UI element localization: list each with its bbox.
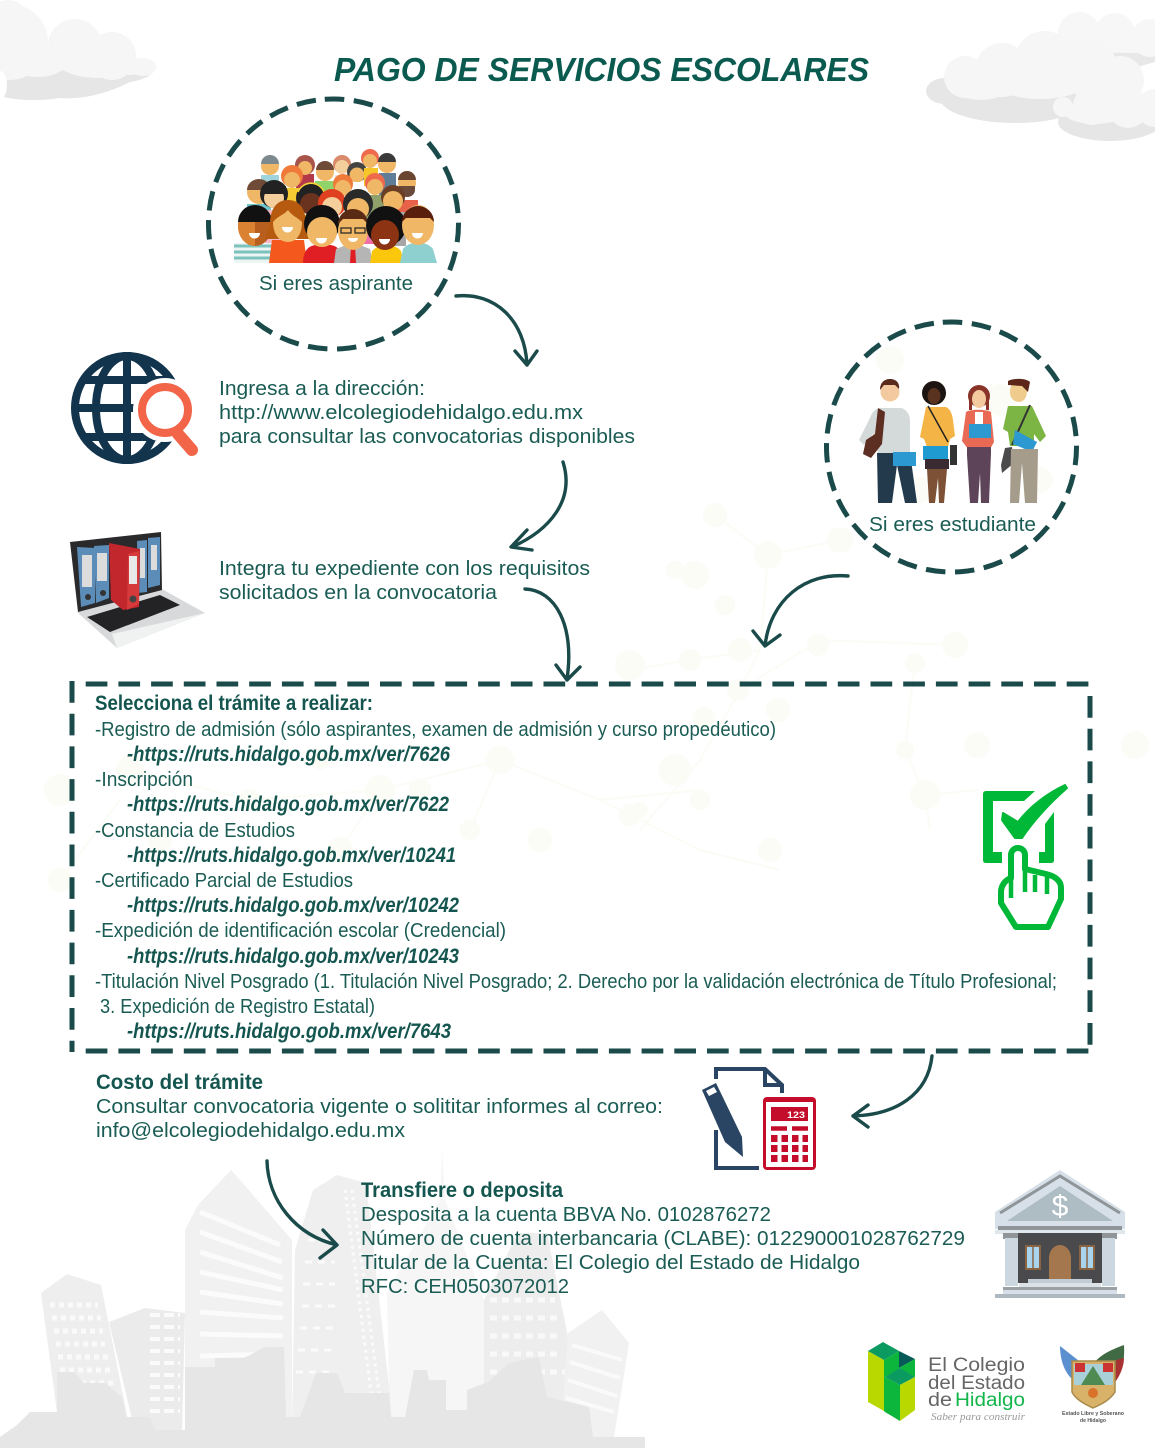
icon: crowd of people: [234, 149, 437, 263]
logo: escudo de Hidalgo: [1060, 1345, 1125, 1424]
list of trámites: -Inscripción: [95, 768, 193, 791]
escudo caption: Estado Libre y Soberano: [1062, 1411, 1125, 1417]
student 2: [920, 381, 957, 503]
logo wordmark: Hidalgo: [955, 1390, 1025, 1411]
text: transfiere o deposita: [361, 1179, 965, 1298]
calculator: 123: [787, 1110, 805, 1120]
text: transfiere o deposita: Transfiere o deposita: [361, 1179, 563, 1202]
logo mark: [868, 1342, 915, 1421]
pencil: [702, 1083, 743, 1157]
middle row: [247, 179, 406, 246]
checkbox frame: [983, 791, 1054, 863]
roof: [995, 1170, 1125, 1222]
icon: globe with magnifier: [75, 352, 197, 464]
right tower: [484, 1233, 580, 1420]
columns: [1003, 1233, 1117, 1286]
flags: [1060, 1346, 1088, 1382]
list of trámites: -Constancia de Estudios: [95, 819, 295, 842]
cloud: top left: [0, 0, 156, 100]
arrow: costo to transfiere: [267, 1161, 337, 1258]
arrow: expediente to trámite: [525, 589, 580, 680]
list of trámites: -Titulación Nivel Posgrado (1. Titulación Nivel Posgrado; 2. Derecho por la validación electrónica de Título Profesional;: [95, 970, 1057, 993]
door: [1049, 1245, 1071, 1279]
person 4: [334, 209, 373, 263]
list of trámites: -Expedición de identificación escolar (Credencial): [95, 919, 506, 942]
logo wordmark: Saber para construir: [931, 1412, 1025, 1423]
escudo caption: [1062, 1411, 1125, 1424]
cloud: top right: [926, 12, 1155, 141]
dollar sign: $: [1052, 1190, 1069, 1223]
text: transfiere o deposita: Número de cuenta interbancaria (CLABE): 012290001028762729: [361, 1227, 965, 1250]
text: ingresa a la dirección: Ingresa a la dirección:: [219, 377, 425, 400]
estudiante circle: [818, 314, 1085, 580]
text: transfiere o deposita: Desposita a la cuenta BBVA No. 0102876272: [361, 1203, 771, 1226]
screen: [70, 532, 162, 612]
icon: four students: [859, 379, 1046, 503]
list of trámites: -https://ruts.hidalgo.gob.mx/ver/10242: [127, 894, 459, 917]
globe: [75, 352, 179, 464]
logo wordmark: de: [928, 1390, 952, 1411]
person 6: [400, 205, 437, 263]
student 1: [859, 379, 917, 503]
foreground silhouette: [0, 1347, 645, 1448]
escudo caption: de Hidalgo: [1080, 1418, 1107, 1424]
text: costo del trámite: [96, 1071, 663, 1142]
person 3: [303, 205, 342, 263]
list of trámites: -https://ruts.hidalgo.gob.mx/ver/10241: [127, 844, 456, 867]
back cloud: [1058, 12, 1155, 72]
text: costo del trámite: Costo del trámite: [96, 1071, 263, 1094]
central pale spire: [387, 1150, 495, 1430]
text: integra tu expediente: solicitados en la convocatoria: [219, 581, 498, 604]
dashed ring: [200, 91, 467, 357]
student 3: [962, 385, 994, 503]
background: city skyline: [0, 1150, 645, 1448]
list of trámites: -Registro de admisión (sólo aspirantes, examen de admisión y curso propedéutico): [95, 718, 776, 741]
text: integra tu expediente: Integra tu expediente con los requisitos: [219, 557, 590, 580]
laptop base: [77, 588, 205, 648]
steps: [1028, 1279, 1092, 1284]
low tower: [109, 1308, 185, 1432]
list of trámites: -https://ruts.hidalgo.gob.mx/ver/7622: [127, 793, 449, 816]
text: ingresa a la dirección: para consultar las convocatorias disponibles: [219, 425, 635, 448]
logo wordmark: El Colegio: [928, 1355, 1025, 1376]
arrow: aspirante to dirección: [456, 296, 537, 365]
front row: [234, 200, 437, 263]
dashed ring: [818, 314, 1085, 580]
dashed border: [72, 681, 1093, 1052]
tilted left tower: [41, 1274, 128, 1420]
list of trámites: -https://ruts.hidalgo.gob.mx/ver/7643: [127, 1020, 451, 1043]
icon: bank building: [995, 1170, 1125, 1298]
document: [716, 1069, 782, 1168]
text: ingresa a la dirección: [219, 377, 635, 448]
far right tower: [560, 1310, 629, 1437]
facade: [1018, 1233, 1102, 1283]
panel: selecciona el trámite: [72, 681, 1093, 1052]
heading: selecciona: Selecciona el trámite a realizar:: [95, 692, 373, 715]
dotted tower: [292, 1175, 392, 1430]
person 5: [366, 206, 406, 263]
person 2: [265, 200, 311, 263]
text: ingresa a la dirección: http://www.elcolegiodehidalgo.edu.mx: [219, 401, 584, 424]
tall tower: [185, 1170, 292, 1420]
logo wordmark: del Estado: [928, 1373, 1025, 1394]
list of trámites: 3. Expedición de Registro Estatal): [100, 995, 375, 1018]
magnifier: [133, 378, 197, 450]
text: transfiere o deposita: Titular de la Cuenta: El Colegio del Estado de Hidalgo: [361, 1251, 860, 1274]
list of trámites: -https://ruts.hidalgo.gob.mx/ver/10243: [127, 945, 459, 968]
windows: [1026, 1246, 1094, 1269]
student 4: [1001, 379, 1046, 503]
label: si eres estudiante: Si eres estudiante: [869, 513, 1036, 536]
icon: laptop with binders: [70, 532, 205, 648]
text: costo del trámite: Consultar convocatoria vigente o solititar informes al correo:: [96, 1095, 663, 1118]
label: si eres aspirante: Si eres aspirante: [259, 272, 413, 295]
logo wordmark: [928, 1355, 1025, 1423]
blue binders: [77, 537, 160, 607]
background: molecule pattern: [44, 346, 1149, 892]
text: integra tu expediente: [219, 557, 590, 604]
text: costo del trámite: info@elcolegiodehidalgo.edu.mx: [96, 1119, 406, 1142]
title: PAGO DE SERVICIOS ESCOLARES: [334, 51, 869, 88]
check mark: [1002, 785, 1067, 838]
list of trámites: -Certificado Parcial de Estudios: [95, 869, 353, 892]
front cloud: [1053, 87, 1155, 141]
red binder: [109, 543, 140, 610]
text: transfiere o deposita: RFC: CEH0503072012: [361, 1275, 569, 1298]
list of trámites: -https://ruts.hidalgo.gob.mx/ver/7626: [127, 743, 450, 766]
back row: [261, 149, 418, 230]
hand: [1001, 848, 1061, 927]
arrow: dirección to expediente: [511, 462, 566, 550]
arrow: estudiante to trámite: [753, 576, 848, 646]
icon: document, pencil and calculator: [702, 1069, 816, 1170]
main cloud: [926, 31, 1155, 123]
aspirante circle: [200, 91, 467, 357]
logo: El Colegio del Estado de Hidalgo: [868, 1342, 1025, 1423]
list of trámites: [95, 718, 1057, 1043]
shield: [1072, 1361, 1115, 1408]
person 1: [234, 205, 274, 263]
arrow: trámite to costo: [853, 1056, 932, 1127]
icon: checkbox and pointing hand: [983, 785, 1067, 927]
